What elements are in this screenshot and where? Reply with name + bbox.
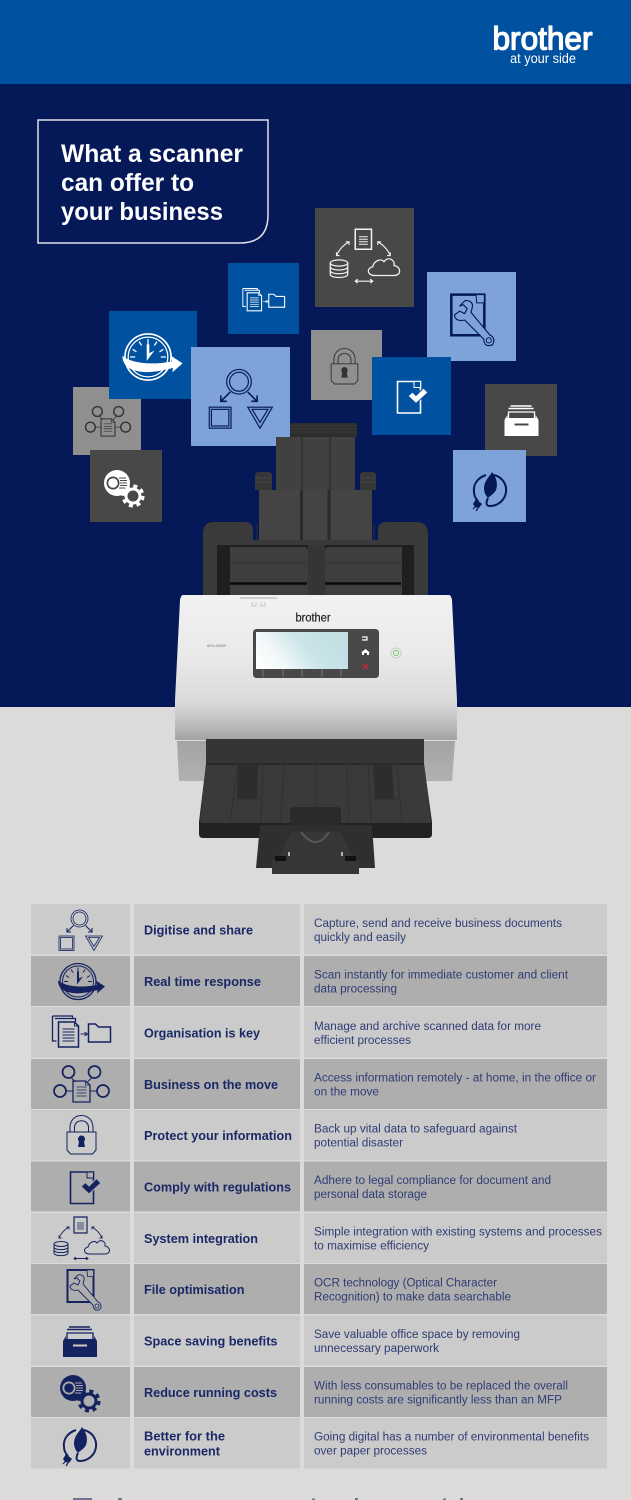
row: Comply with regulations: Adhere to legal compliance for document and	[314, 1175, 551, 1187]
logo: brother at your side: at your side	[510, 50, 576, 66]
model label: ADS-4900W	[207, 643, 226, 648]
row: Better for the environment	[31, 1418, 607, 1468]
row: Protect your information: potential disaster	[314, 1138, 403, 1150]
row: Space saving benefits: unnecessary paperwork	[314, 1343, 439, 1355]
row: Comply with regulations: Comply with regulations	[144, 1180, 291, 1194]
row: Real time response	[31, 956, 607, 1006]
tile: space saving	[485, 384, 557, 456]
tile: protect information	[311, 330, 382, 400]
row: Digitise and share	[31, 904, 607, 954]
row: Space saving benefits: Save valuable office space by removing	[314, 1329, 520, 1341]
row: Real time response: data processing	[314, 984, 397, 996]
row: Better for the environment: environment	[144, 1444, 221, 1458]
tile: comply with regulations	[372, 357, 451, 435]
tile: real time response	[109, 311, 197, 399]
row: Organisation is key	[31, 1007, 607, 1058]
row: Business on the move	[31, 1059, 607, 1109]
row: Digitise and share: Digitise and share	[144, 922, 253, 938]
row: Reduce running costs: running costs are significantly less than an MFP	[314, 1394, 562, 1406]
tile: system integration	[315, 208, 414, 307]
row: Business on the move: Access information remotely - at home, in the office or	[314, 1072, 596, 1084]
row: Business on the move: on the move	[314, 1086, 379, 1098]
clipped heading remnants at the bottom edge	[73, 1498, 463, 1500]
title box: your business	[61, 198, 223, 226]
row: System integration	[31, 1213, 607, 1263]
row: Organisation is key: Organisation is key	[144, 1026, 261, 1040]
printed brand on scanner: brother	[296, 612, 331, 624]
document feeder	[203, 423, 428, 595]
row: Reduce running costs: With less consumables to be replaced the overall	[314, 1380, 568, 1392]
tile: reduce running costs	[90, 450, 162, 522]
row: File optimisation	[31, 1264, 607, 1314]
row: Business on the move: Business on the move	[144, 1077, 278, 1092]
output tray	[199, 763, 432, 838]
scanner body	[175, 595, 457, 740]
row: Real time response: Real time response	[144, 974, 261, 989]
row: Digitise and share: quickly and easily	[314, 932, 406, 944]
power button	[391, 648, 401, 658]
row: Better for the environment: Going digital has a number of environmental benefits	[314, 1432, 589, 1444]
tile: better for the environment	[453, 450, 526, 522]
tile: digitise and share	[191, 347, 290, 446]
title box: What a scanner	[61, 140, 243, 168]
logo: brother at your side: brother	[492, 20, 593, 56]
row: Better for the environment: over paper processes	[314, 1446, 427, 1458]
navy hero panel	[0, 84, 631, 707]
row: Comply with regulations: personal data storage	[314, 1189, 427, 1201]
row: Organisation is key: Manage and archive scanned data for more	[314, 1021, 541, 1033]
tile: file optimisation	[427, 272, 516, 361]
row: System integration: Simple integration with existing systems and processes	[314, 1226, 602, 1238]
row: Space saving benefits: Space saving benefits	[144, 1334, 278, 1348]
row: Protect your information: Back up vital data to safeguard against	[314, 1124, 518, 1136]
header band	[0, 0, 631, 84]
scanner illustration	[175, 423, 457, 874]
row: File optimisation: OCR technology (Optical Character	[314, 1278, 497, 1290]
row: Reduce running costs	[31, 1367, 607, 1417]
title box	[38, 120, 268, 243]
row: Comply with regulations	[31, 1162, 607, 1212]
small marks on top edge	[240, 597, 277, 606]
row: Space saving benefits	[31, 1316, 607, 1366]
row: Organisation is key: efficient processes	[314, 1035, 411, 1047]
row: Reduce running costs: Reduce running costs	[144, 1385, 277, 1400]
tile: organisation	[228, 263, 299, 334]
row: Protect your information	[31, 1110, 607, 1160]
row: Protect your information: Protect your information	[144, 1128, 292, 1143]
benefits table	[31, 904, 607, 1468]
tile: business on the move	[73, 387, 141, 455]
row: File optimisation: Recognition) to make data searchable	[314, 1292, 511, 1304]
row: System integration: System integration	[144, 1231, 258, 1246]
row: File optimisation: File optimisation	[144, 1282, 245, 1297]
lower body sides	[177, 741, 455, 781]
row: Digitise and share: Capture, send and receive business documents	[314, 918, 562, 930]
row: Real time response: Scan instantly for immediate customer and client	[314, 970, 569, 982]
tray extension	[256, 807, 375, 874]
output slot	[206, 739, 424, 764]
title box: can offer to	[61, 169, 194, 197]
row: Better for the environment: Better for the	[144, 1428, 225, 1444]
row: System integration: to maximise efficiency	[314, 1240, 429, 1252]
control panel	[253, 629, 379, 678]
